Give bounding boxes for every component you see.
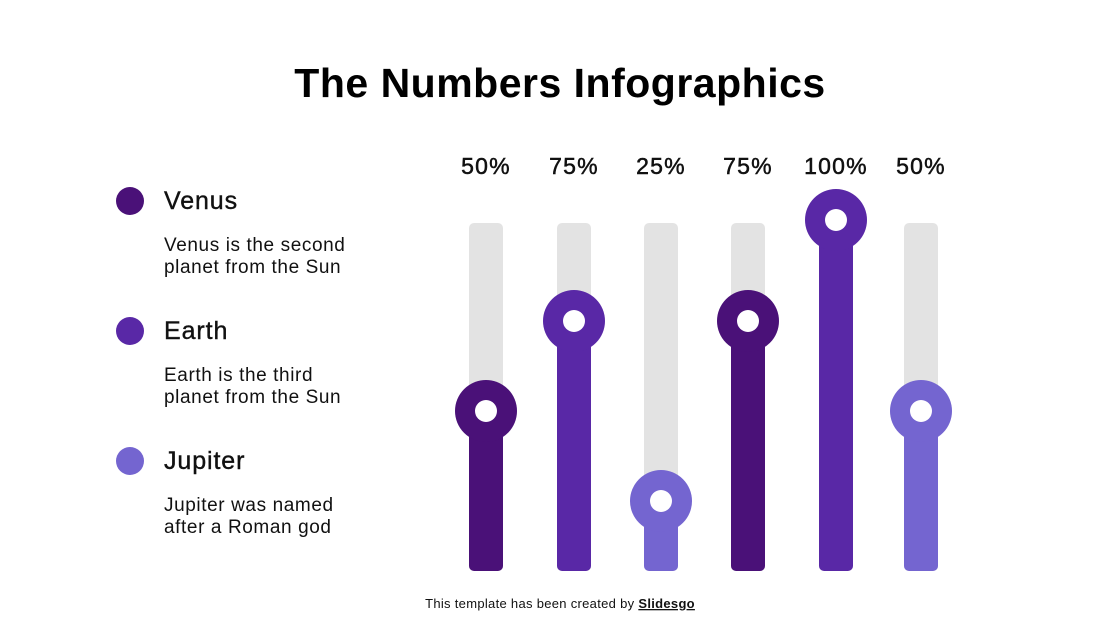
slider 4: 75% bbox=[717, 153, 779, 571]
slider 3: 25%: 25% bbox=[636, 153, 686, 179]
legend: Jupiter: Jupiter bbox=[164, 447, 245, 475]
legend: Venus: planet from the Sun bbox=[164, 257, 341, 278]
slider 5: 100%: 100% bbox=[804, 153, 868, 179]
slider 2: 75% bbox=[543, 153, 605, 571]
legend: Earth: Earth bbox=[164, 317, 228, 345]
legend: Jupiter: Jupiter was named bbox=[164, 495, 334, 516]
legend: Venus: Venus is the second bbox=[164, 235, 345, 256]
legend: Jupiter bbox=[116, 447, 334, 538]
slider 1: 50%: 50% bbox=[461, 153, 511, 179]
legend: Earth: Earth is the third bbox=[164, 365, 313, 386]
slider 2: 75%: 75% bbox=[549, 153, 599, 179]
slider 3: 25% bbox=[630, 153, 692, 571]
slider 4: 75%: 75% bbox=[723, 153, 773, 179]
legend: Venus bbox=[116, 187, 345, 278]
slider 5: 100% bbox=[804, 153, 868, 571]
title: The Numbers Infographics bbox=[294, 60, 826, 106]
legend: Earth: planet from the Sun bbox=[164, 387, 341, 408]
chart: sliders bbox=[455, 153, 952, 571]
legend: Earth bbox=[116, 317, 341, 408]
footer credit: This template has been created by Slidesgo bbox=[425, 596, 695, 611]
legend: Venus: Venus bbox=[164, 187, 238, 215]
slider 1: 50% bbox=[455, 153, 517, 571]
legend: Jupiter: after a Roman god bbox=[164, 517, 332, 538]
slider 6: 50% bbox=[890, 153, 952, 571]
slider 6: 50%: 50% bbox=[896, 153, 946, 179]
